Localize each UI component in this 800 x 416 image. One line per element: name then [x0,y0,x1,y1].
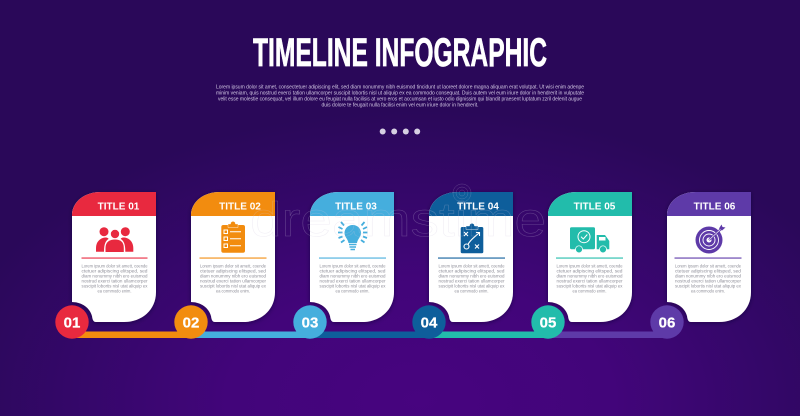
description: ea commodo enim. [98,288,132,294]
description: ea commodo enim. [336,288,370,294]
description: diam nonummy nibh ero euismod [200,274,267,278]
marker 02 [174,305,208,339]
header: title 01: TITLE 01 [98,201,140,212]
description: nostrud exerci tation ullamcorper [320,278,386,284]
intro text block: duis dolore te feugait nulla facilisi enim vel eum iriure dolor in hendrerit. [322,102,478,108]
description: nostrud exerci tation ullamcorper [438,278,505,284]
marker 04 [412,305,446,339]
panel: step 05 [548,192,632,322]
description: diam nonummy nibh ero euismod [556,274,623,278]
description: diam nonummy nibh ero euismod [82,274,148,278]
icon: target [696,224,726,254]
marker 04: 04 [421,314,438,332]
pagination dots [380,128,420,134]
description: nostrud exerci tation ullamcorper [675,278,742,284]
divider [438,258,505,259]
divider [319,258,386,259]
description: ea commodo enim. [691,288,725,294]
description: ctetuer adipiscing elitsped, sed [200,268,267,274]
description: ctetuer adipiscing elitsped, sed [82,268,148,274]
description [675,264,742,294]
marker 01: 01 [64,314,80,332]
description [200,264,267,294]
description: suscipit lobortis nisl utat aliquip ex [556,284,623,288]
description: diam nonummy nibh ero euismod [438,274,505,278]
marker 03: 03 [302,314,318,332]
marker 05: 05 [540,314,556,332]
marker 06: 06 [659,314,675,332]
description: Lorem ipsum dolor sit amett, coende [675,264,742,268]
divider [82,258,148,259]
description: suscipit lobortis nisl utat aliquip ex [320,284,386,288]
description: nostrud exerci tation ullamcorper [556,278,623,284]
header: title 02: TITLE 02 [219,201,261,212]
intro text block: Lorem ipsum dolor sit amet, consectetuer adipiscing elit, sed diam nonummy nibh euismod tincidunt ut laoreet dolore magna aliquam erat volutpat. Ut wisi enim adenpe [216,84,584,90]
description: ctetuer adipiscing elitsped, sed [556,268,623,274]
panel: step 02 [191,192,275,322]
header: title 05: TITLE 05 [574,201,616,212]
description: suscipit lobortis nisl utat aliquip ex [438,284,505,288]
watermark: dreamstime [250,194,546,247]
description: suscipit lobortis nisl utat aliquip ex [200,284,267,288]
icon: strategy clipboard [461,223,483,253]
marker 01 [55,305,89,339]
icon: light bulb [338,222,368,250]
description: Lorem ipsum dolor sit amett, coende [82,264,148,268]
icon: delivery truck [570,227,609,253]
icon: checklist clipboard [221,221,245,253]
panel: step 01 [72,192,156,322]
header: title 04: TITLE 04 [457,201,499,212]
marker 03 [293,305,327,339]
divider [556,258,623,259]
description [82,264,148,294]
intro text block [216,84,584,108]
timeline bar [72,332,667,338]
intro text block: velit esse molestie consequat, vel illum dolore eu feugiat nulla facilisis at vero eros et accumsan et iusto odio dignissim qui blandit praesent luptatum zzril delenit augue [218,96,582,102]
description [556,264,623,294]
panel: step 03 [310,192,394,322]
description [320,264,386,294]
description: nostrud exerci tation ullamcorper [200,278,267,284]
icon: people [96,227,133,252]
header: title 06: TITLE 06 [694,201,736,212]
description: ctetuer adipiscing elitsped, sed [675,268,742,274]
marker 06 [650,305,684,339]
divider [200,258,266,259]
description [438,264,505,294]
description: ea commodo enim. [572,288,606,294]
header: title 03: TITLE 03 [335,201,377,212]
description: Lorem ipsum dolor sit amett, coende [556,264,623,268]
description: suscipit lobortis nisl utat aliquip ex [82,284,148,288]
marker 02: 02 [183,314,199,332]
description: ctetuer adipiscing elitsped, sed [320,268,386,274]
description: ctetuer adipiscing elitsped, sed [438,268,505,274]
description: Lorem ipsum dolor sit amett, coende [320,264,386,268]
description: nostrud exerci tation ullamcorper [82,278,148,284]
panel: step 04 [429,192,513,322]
title: TIMELINE INFOGRAPHIC [253,31,547,75]
divider [674,258,742,259]
description: diam nonummy nibh ero euismod [675,274,742,278]
panel: step 06 [667,192,751,322]
marker 05 [531,305,565,339]
description: Lorem ipsum dolor sit amett, coende [438,264,505,268]
description: diam nonummy nibh ero euismod [320,274,386,278]
description: ea commodo enim. [216,288,250,294]
description: suscipit lobortis nisl utat aliquip ex [675,284,742,288]
description: Lorem ipsum dolor sit amett, coende [200,264,267,268]
description: ea commodo enim. [454,288,488,294]
intro text block: minim veniam, quis nostrud exerci tation ullamcorper suscipit lobortis nisl ut aliquip ex ea commodo consequat. Duis autem vel eum iriure dolor in hendrerit in vulputate [216,90,584,96]
